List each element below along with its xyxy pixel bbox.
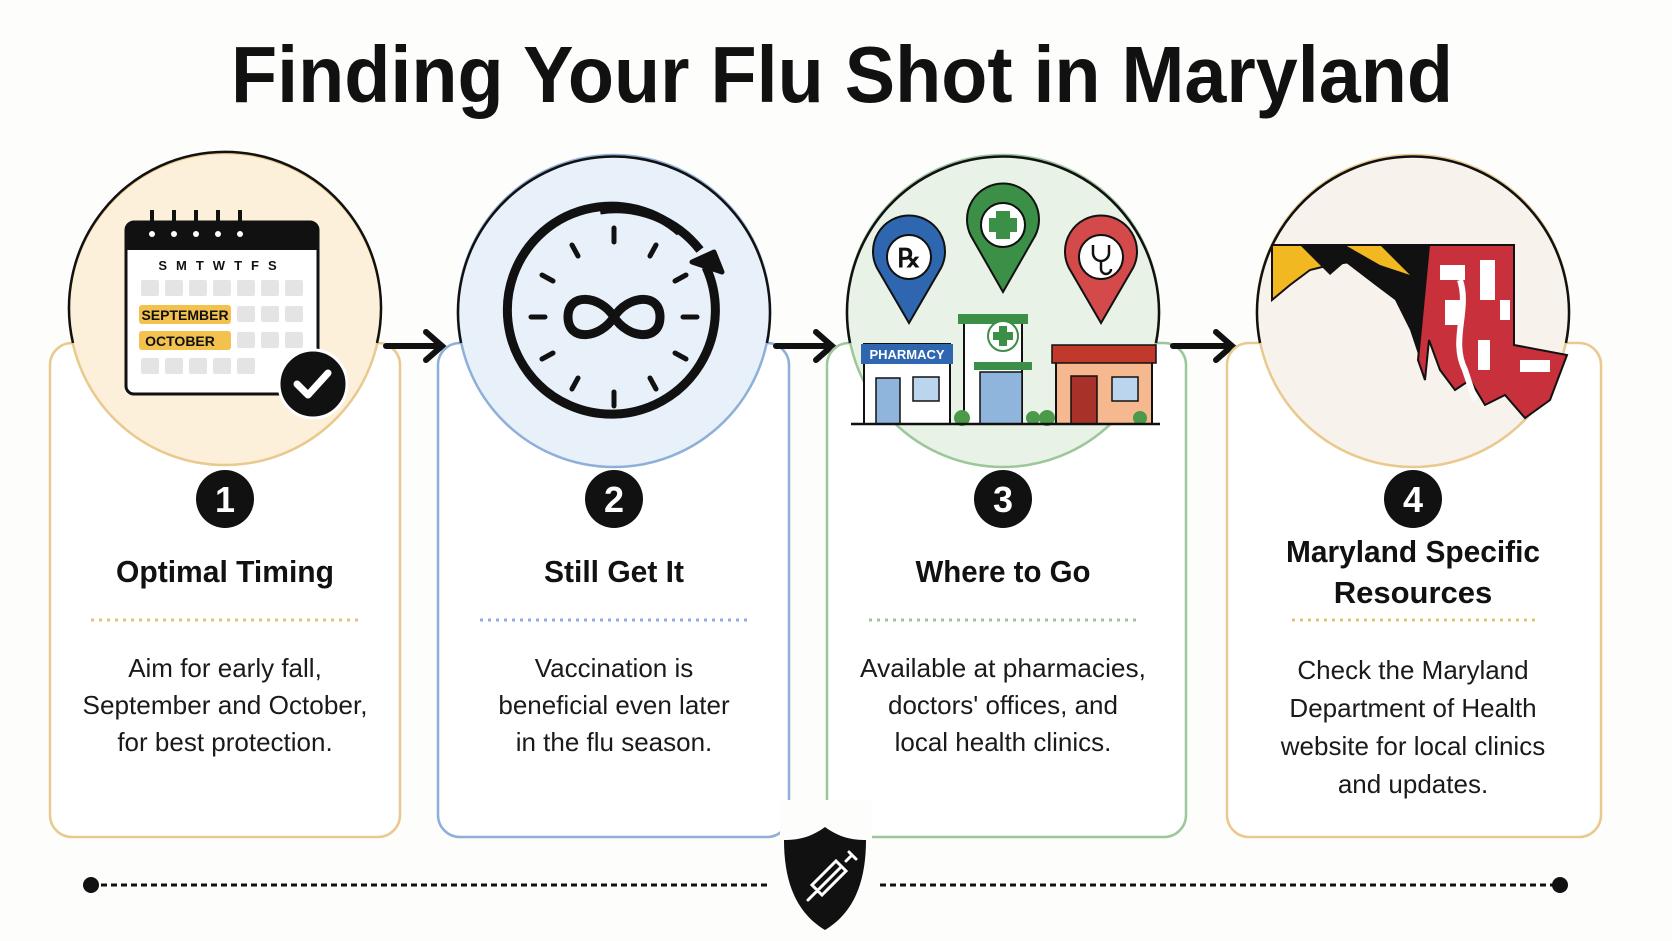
icon: buildings: PHARMACY: [869, 347, 945, 362]
icon: pins: ℞: [897, 243, 921, 273]
icon circle 2: [458, 155, 770, 467]
body 4: website for local clinics: [1280, 731, 1545, 761]
timeline: [83, 877, 1568, 893]
icon: pins: [873, 184, 1137, 323]
body 2: beneficial even later: [498, 690, 730, 720]
icon: calendar: [126, 210, 318, 394]
panel: card 1: [50, 152, 400, 837]
panel: card 4: [1227, 155, 1601, 837]
body 1: September and October,: [82, 690, 368, 720]
number 1: [196, 470, 254, 528]
body 4: Check the Maryland: [1297, 655, 1529, 685]
body 2: in the flu season.: [516, 727, 712, 757]
number 2: [585, 470, 643, 528]
body 4: Department of Health: [1289, 693, 1537, 723]
icon: Maryland flag map: [1272, 245, 1567, 418]
icon: buildings: [851, 314, 1160, 426]
heading 4: Resources: [1334, 575, 1492, 610]
body 3: local health clinics.: [895, 727, 1111, 757]
title: Finding Your Flu Shot in Maryland: [231, 30, 1453, 119]
heading 3: Where to Go: [916, 554, 1090, 589]
icon: shield with syringe: [780, 800, 872, 930]
icon: calendar: OCTOBER: [145, 333, 215, 349]
body 3: doctors' offices, and: [888, 690, 1118, 720]
arrow 2: [776, 332, 832, 360]
arrow 1: [386, 332, 442, 360]
body 1: Aim for early fall,: [128, 653, 322, 683]
icon: check badge: [279, 350, 347, 418]
panel: card 2: [438, 155, 789, 837]
icon: clock with infinity: [507, 206, 722, 414]
arrow 3: [1173, 332, 1232, 360]
body 4: and updates.: [1338, 769, 1488, 799]
number 1: 1: [215, 479, 235, 520]
icon circle 1: [69, 152, 381, 465]
icon: calendar: SEPTEMBER: [141, 307, 229, 323]
number 3: [974, 470, 1032, 528]
panel: card 3: [827, 155, 1186, 837]
heading 4: Maryland Specific: [1286, 534, 1540, 569]
body 2: Vaccination is: [535, 653, 693, 683]
heading 1: Optimal Timing: [116, 554, 334, 589]
number 2: 2: [604, 479, 624, 520]
icon circle 4: [1257, 155, 1569, 467]
icon circle 3: [847, 155, 1160, 467]
number 4: 4: [1403, 479, 1423, 520]
body 1: for best protection.: [117, 727, 333, 757]
heading 2: Still Get It: [544, 554, 684, 589]
icon: calendar: SMTWTFS: [158, 258, 286, 273]
number 4: [1384, 470, 1442, 528]
body 3: Available at pharmacies,: [860, 653, 1146, 683]
number 3: 3: [993, 479, 1013, 520]
